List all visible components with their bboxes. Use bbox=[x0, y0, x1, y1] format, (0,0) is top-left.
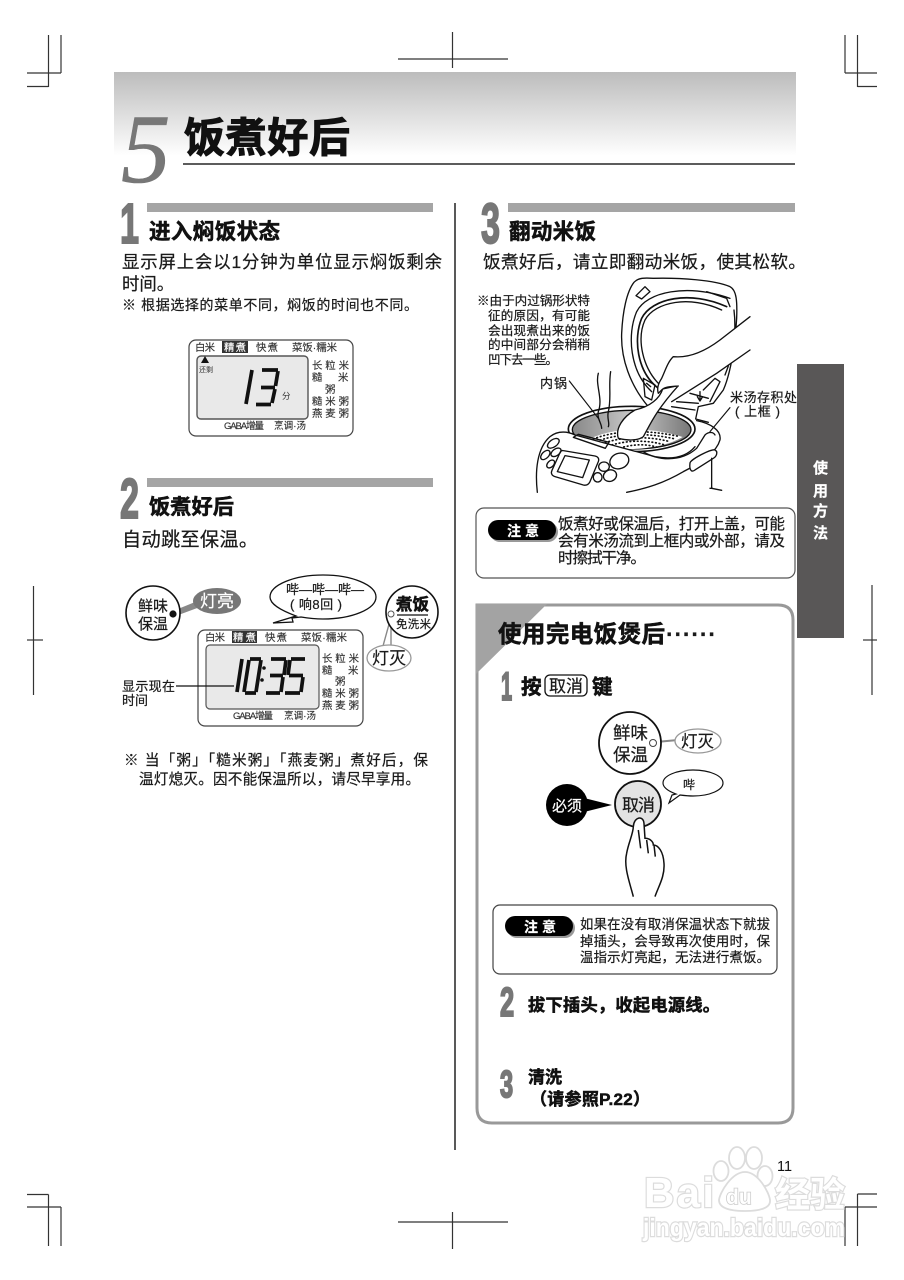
step 2 heading: 饭煮好后 bbox=[149, 495, 234, 519]
step 2 bbox=[120, 466, 433, 551]
caution box: unplugging: 如果在没有取消保温状态下就拔 bbox=[580, 917, 770, 932]
illustration note: 会出现煮出来的饭 bbox=[488, 323, 590, 338]
callout: must press bbox=[546, 784, 612, 826]
step 2 body text: 自动跳至保温。 bbox=[122, 529, 258, 551]
LCD display: 13 minutes remaining: 烹调·汤 bbox=[274, 420, 306, 432]
LCD display: current time 10:35: 快煮 bbox=[265, 632, 287, 644]
panel step 2: 2 bbox=[500, 980, 514, 1026]
illustration note: 征的原因，有可能 bbox=[488, 308, 590, 323]
LCD display: current time 10:35: 长粒米 bbox=[322, 652, 360, 665]
step 1 body text: 显示屏上会以1分钟为单位显示焖饭剩余 bbox=[122, 252, 442, 272]
panel: after using the rice cooker bbox=[476, 604, 793, 1123]
panel step 1: 键 bbox=[592, 676, 612, 699]
LCD display: current time 10:35 bbox=[198, 630, 363, 726]
diagram: keep warm lamp off: 保温 bbox=[613, 745, 648, 765]
page title: 饭煮好后 bbox=[184, 115, 350, 161]
caution box: unplugging: 掉插头，会导致再次使用时，保 bbox=[580, 933, 771, 949]
watermark: jingyan.baidu.com bbox=[642, 1214, 845, 1242]
step 1 number: 1 bbox=[120, 191, 139, 255]
cancel button pressed by finger bbox=[615, 781, 664, 897]
cook button with lamp off: 煮饭 bbox=[396, 595, 430, 614]
LCD display: current time 10:35: 米 bbox=[348, 664, 359, 677]
LCD display: current time 10:35: 粥 bbox=[335, 676, 345, 688]
speech bubble: beeps: 哔—哔—哔— bbox=[286, 582, 364, 597]
watermark: 经验 bbox=[775, 1176, 845, 1215]
diagram: keep warm lamp off: 鲜味 bbox=[613, 723, 648, 743]
LCD display: 13 minutes remaining: 还剩 bbox=[199, 365, 213, 374]
diagram: keep warm lit bbox=[126, 586, 241, 640]
step 3 number: 3 bbox=[481, 191, 500, 255]
LCD display: current time 10:35: 菜饭·糯米 bbox=[301, 631, 348, 644]
LCD display: 13 minutes remaining: 白米 bbox=[195, 341, 216, 354]
speech bubble: beep bbox=[663, 770, 723, 803]
panel step 2: 拔下插头，收起电源线。 bbox=[528, 995, 720, 1015]
LCD display: current time 10:35: 糙 bbox=[322, 664, 333, 677]
side tab: how to use: 方 bbox=[813, 502, 828, 520]
step 2 number: 2 bbox=[120, 466, 139, 530]
column divider bbox=[454, 203, 456, 1150]
LCD display: current time 10:35: 白米 bbox=[205, 631, 226, 644]
panel step 3 bbox=[500, 1062, 650, 1109]
watermark: Bai bbox=[644, 1169, 714, 1216]
caution box: step 3 bbox=[476, 508, 795, 578]
step 1 body text bbox=[122, 252, 442, 313]
label: rice water collection: ( 上框 ) bbox=[735, 404, 780, 419]
LCD display: 13 minutes remaining: 菜饭·糯米 bbox=[292, 341, 338, 354]
LCD display: current time 10:35: 糙米粥 bbox=[322, 687, 359, 700]
panel step 1 bbox=[501, 663, 612, 709]
panel step 3: 3 bbox=[500, 1062, 513, 1105]
caution box: step 3: 饭煮好或保温后，打开上盖，可能 bbox=[558, 515, 785, 533]
step 1 heading: 进入焖饭状态 bbox=[149, 219, 280, 244]
LCD display: current time 10:35: GABA增量 bbox=[233, 710, 273, 722]
LCD display: 13 minutes remaining: GABA增量 bbox=[224, 420, 264, 432]
caution box: step 3: 时擦拭干净。 bbox=[558, 549, 646, 567]
illustration note: 凹下去一些。 bbox=[488, 353, 558, 367]
panel step 3: 清洗 bbox=[528, 1068, 562, 1087]
illustration note: ※由于内过锅形状特 bbox=[477, 293, 590, 308]
label: rice water collection: 米汤存积处 bbox=[730, 390, 797, 405]
cook button with lamp off: 免洗米 bbox=[396, 617, 432, 631]
callout: must press: 必须 bbox=[552, 798, 582, 815]
LCD display: 13 minutes remaining: 糙 bbox=[312, 371, 323, 384]
current time label bbox=[122, 679, 234, 708]
panel title: ······ bbox=[666, 621, 716, 647]
panel step 3: （请参照P.22） bbox=[530, 1089, 650, 1109]
LCD display: 13 minutes remaining bbox=[189, 340, 353, 436]
LCD display: 13 minutes remaining: 米 bbox=[338, 371, 349, 384]
LCD display: current time 10:35: 精煮 bbox=[233, 631, 256, 644]
LCD display: 13 minutes remaining: 分 bbox=[282, 391, 291, 401]
page number: 11 bbox=[777, 1159, 792, 1175]
panel step 2 bbox=[500, 980, 720, 1026]
diagram: keep warm lamp off: 灯灭 bbox=[681, 732, 714, 751]
current time label: 显示现在 bbox=[122, 679, 175, 694]
illustration note bbox=[477, 293, 590, 367]
watermark: du bbox=[726, 1186, 752, 1209]
caution box: unplugging: 温指示灯亮起，无法进行煮饭。 bbox=[580, 949, 770, 965]
step 2 footnote: 温灯熄灭。因不能保温所以，请尽早享用。 bbox=[139, 771, 420, 788]
LCD display: current time 10:35: 烹调·汤 bbox=[284, 710, 316, 722]
diagram: keep warm lamp off bbox=[599, 712, 721, 774]
LCD display: 13 minutes remaining: 精煮 bbox=[224, 341, 246, 354]
step 3 bbox=[481, 191, 806, 272]
caution box: unplugging bbox=[493, 905, 777, 974]
caution box: step 3: 注意 bbox=[507, 523, 539, 539]
section number 5: 5 bbox=[121, 95, 170, 204]
step 3 heading: 翻动米饭 bbox=[509, 220, 596, 244]
LCD display: 13 minutes remaining: 粥 bbox=[325, 384, 335, 396]
cancel key glyph: 取消 bbox=[549, 677, 583, 696]
step 2 footnote bbox=[124, 752, 428, 788]
watermark paw icon bbox=[714, 1147, 772, 1211]
header band bbox=[114, 72, 796, 204]
diagram: keep warm lit: 鲜味 bbox=[138, 598, 168, 615]
caution box: step 3: 会有米汤流到上框内或外部，请及 bbox=[558, 532, 785, 550]
diagram: keep warm lit: 灯亮 bbox=[200, 592, 234, 611]
side tab: how to use bbox=[797, 364, 844, 638]
illustration: rice cooker with hand and spatula bbox=[536, 278, 752, 492]
label: inner pot: 内锅 bbox=[540, 376, 567, 391]
panel title: 使用完电饭煲后 bbox=[498, 621, 665, 647]
LCD display: 13 minutes remaining: 快煮 bbox=[256, 342, 278, 354]
LCD display: 13 minutes remaining: 长粒米 bbox=[312, 359, 350, 372]
LCD display: current time 10:35: 燕麦粥 bbox=[322, 700, 359, 712]
caution box: unplugging: 注意 bbox=[524, 919, 556, 935]
diagram: keep warm lit: 保温 bbox=[138, 616, 168, 633]
cook button with lamp off bbox=[367, 586, 438, 671]
step 1 body text: 时间。 bbox=[122, 274, 174, 294]
watermark bbox=[642, 1147, 845, 1242]
illustration note: 的中间部分会稍稍 bbox=[488, 337, 590, 352]
side tab: how to use: 法 bbox=[813, 524, 828, 542]
side tab: how to use: 用 bbox=[813, 483, 828, 500]
speech bubble: beep: 哔 bbox=[683, 778, 695, 792]
LCD display: 13 minutes remaining: 燕麦粥 bbox=[312, 408, 349, 420]
cook button with lamp off: 灯灭 bbox=[372, 649, 406, 668]
step 1 bbox=[120, 191, 442, 313]
label: rice water collection bbox=[730, 390, 797, 419]
speech bubble: beeps: ( 响8回 ) bbox=[290, 597, 342, 612]
step 2 footnote: ※ 当「粥」「糙米粥」「燕麦粥」煮好后，保 bbox=[124, 752, 428, 769]
side tab: how to use: 使 bbox=[813, 459, 828, 477]
step 3 body text: 饭煮好后，请立即翻动米饭，使其松软。 bbox=[483, 252, 806, 272]
LCD display: 13 minutes remaining: 糙米粥 bbox=[312, 395, 349, 408]
cancel button pressed by finger: 取消 bbox=[622, 796, 655, 815]
speech bubble: beeps bbox=[270, 575, 376, 623]
panel step 1: 按 bbox=[521, 676, 542, 699]
current time label: 时间 bbox=[122, 693, 148, 708]
step 1 body text: ※ 根据选择的菜单不同，焖饭的时间也不同。 bbox=[122, 297, 418, 313]
panel step 1: 1 bbox=[501, 663, 512, 709]
